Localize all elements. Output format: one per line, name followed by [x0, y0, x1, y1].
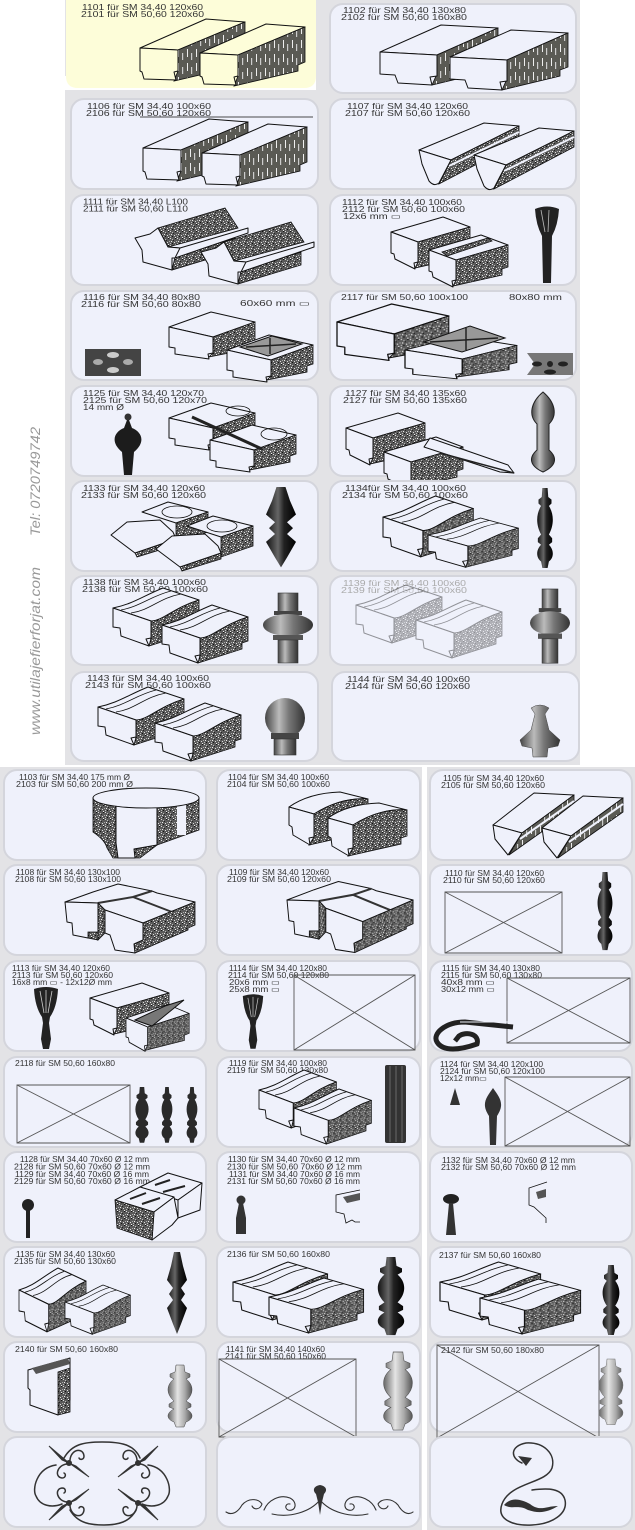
label 1105: 1105 für SM 34,40 120x60 — [443, 774, 544, 783]
background: bottom left sheet — [0, 767, 422, 1530]
sample: brush bar — [243, 994, 263, 1049]
label 1130: 2130 für SM 50,60 70x60 Ø 12 mm — [227, 1162, 362, 1172]
label 1108 — [15, 868, 121, 884]
label 1102 — [341, 6, 468, 22]
label 1112: 2112 für SM 50,60 100x60 — [342, 205, 466, 214]
panel: 1114 — [217, 961, 420, 1051]
label 1102: 1102 für SM 34,40 130x80 — [343, 6, 467, 15]
image placeholder — [437, 1345, 599, 1438]
image placeholder — [294, 975, 415, 1050]
panel: 1139 — [330, 576, 576, 665]
die blocks 2136 — [233, 1262, 364, 1333]
label 1110: 1110 für SM 34,40 120x60 — [445, 869, 544, 878]
label 2136: 2136 für SM 50,60 160x80 — [227, 1250, 330, 1259]
sample: baluster — [168, 1365, 192, 1427]
image placeholder — [445, 892, 562, 953]
panel: 1144 — [332, 672, 579, 761]
image placeholder — [17, 1085, 130, 1143]
label 1101 — [81, 3, 205, 19]
panel: 1101 highlighted — [65, 0, 316, 90]
panel: 1135 — [4, 1247, 206, 1337]
die blocks 2117 — [337, 304, 517, 379]
die blocks 1125 — [169, 403, 296, 472]
label 1116 — [81, 293, 310, 309]
ornament: four leaves scroll — [35, 1442, 169, 1525]
panel: 2137 — [430, 1247, 632, 1337]
die blocks 1128 mirrored — [115, 1173, 202, 1240]
label 1130: 2131 für SM 50,60 70x60 Ø 16 mm — [227, 1177, 360, 1186]
panel: 1111 — [71, 195, 318, 285]
label 1109: 2109 für SM 50,60 120x60 — [227, 875, 331, 884]
label 1139 — [341, 579, 468, 595]
label 1132: 1132 für SM 34,40 70x60 Ø 12 mm — [442, 1156, 575, 1165]
label 1112: 1112 für SM 34,40 100x60 — [342, 198, 463, 207]
label 1116: 60x60 mm ▭ — [240, 299, 310, 308]
label 1110 — [443, 869, 545, 885]
sample: ball finial — [265, 698, 305, 755]
die blocks 1143 — [98, 687, 241, 761]
sample: baluster — [598, 872, 612, 950]
sample: pin — [236, 1196, 246, 1234]
sample: ball knob — [263, 593, 313, 663]
sidebar: website: www.utilajefierforjat.com — [27, 567, 43, 735]
sample: tapered bar — [535, 206, 559, 283]
label 1144 — [345, 675, 471, 691]
label 1124 — [440, 1060, 545, 1083]
label 1104 — [227, 773, 330, 789]
label 1108: 2108 für SM 50,60 130x100 — [15, 875, 121, 884]
label 1114: 20x6 mm ▭ — [229, 978, 280, 987]
label 1133: 2133 für SM 50,60 120x60 — [81, 491, 207, 500]
label 1116: 2116 für SM 50,60 80x80 — [81, 300, 202, 309]
sidebar: phone: Tel: 0720749742 — [27, 427, 43, 536]
panel: 1133 — [71, 481, 318, 571]
label 1128: 1128 für SM 34,40 70x60 Ø 12 mm — [20, 1155, 149, 1164]
label 1135: 2135 für SM 50,60 130x60 — [14, 1257, 116, 1266]
label 1141 — [225, 1345, 326, 1361]
panel: 1124 — [430, 1057, 632, 1147]
label 1133 — [81, 484, 207, 500]
sample: pin — [443, 1194, 459, 1235]
die blocks 1112 — [391, 217, 508, 287]
background: bottom right sheet — [427, 767, 635, 1530]
sample: baluster — [384, 1352, 412, 1430]
label 1114: 25x8 mm ▭ — [229, 985, 280, 994]
label 1105 — [441, 774, 545, 790]
label 1139: 1139 für SM 34,40 100x60 — [343, 579, 467, 588]
ornament: S scroll — [501, 1443, 565, 1525]
label 1143: 2143 für SM 50,60 100x60 — [85, 681, 212, 690]
die blocks 1105 — [493, 793, 623, 858]
panel: 1103 — [4, 770, 206, 860]
image placeholder — [219, 1359, 356, 1437]
label 1104: 2104 für SM 50,60 100x60 — [227, 780, 330, 789]
label 2117 — [341, 293, 562, 302]
panel: 1128 — [4, 1152, 206, 1242]
label 1101: 2101 für SM 50,60 120x60 — [81, 10, 205, 19]
image placeholder — [507, 978, 630, 1043]
panel: 2117 — [330, 291, 576, 380]
label 1143 — [85, 674, 212, 690]
panel: 1125 — [71, 386, 318, 476]
sample: textured bar — [385, 1065, 406, 1143]
label 1114 — [228, 964, 329, 994]
die blocks 1111 — [135, 208, 314, 284]
sample: dark baluster — [378, 1257, 404, 1335]
die blocks 2137 — [440, 1262, 581, 1334]
panel: 2136 — [217, 1247, 420, 1337]
label 1108: 1108 für SM 34,40 130x100 — [16, 868, 120, 877]
die blocks 1106 — [140, 117, 313, 186]
die block fragment — [336, 1190, 360, 1223]
sample: ball knob — [530, 589, 570, 663]
label 1134 — [342, 484, 469, 500]
label 1111: 2111 für SM 50,60 L110 — [83, 204, 189, 214]
die blocks 1102 — [380, 25, 568, 90]
label 1105: 2105 für SM 50,60 120x60 — [441, 781, 545, 790]
label 1107 — [345, 102, 471, 118]
label 1107: 2107 für SM 50,60 120x60 — [345, 109, 471, 118]
die block fragment — [28, 1358, 70, 1415]
label 1138: 1138 für SM 34,40 100x60 — [83, 578, 207, 587]
label 1132 — [441, 1156, 576, 1172]
label 2137: 2137 für SM 50,60 160x80 — [439, 1251, 541, 1260]
image placeholder — [505, 1077, 630, 1146]
label 1138 — [82, 578, 209, 594]
label 1115 — [441, 964, 542, 994]
label 1127: 2127 für SM 50,60 135x60 — [343, 396, 468, 405]
label 1124: 2124 für SM 50,60 120x100 — [440, 1067, 545, 1076]
label 1144: 1144 für SM 34,40 100x60 — [347, 675, 471, 684]
label 1125: 1125 für SM 34,40 120x70 — [83, 389, 205, 398]
label 1134: 1134für SM 34,40 100x60 — [345, 484, 467, 493]
panel: 1110 — [430, 865, 632, 955]
label 1101: 1101 für SM 34,40 120x60 — [82, 3, 204, 12]
label 1127 — [343, 389, 468, 405]
label 1113: 16x8 mm ▭ - 12x12Ø mm — [12, 978, 112, 987]
label 1106 — [86, 102, 212, 118]
sample: ball-headed bar — [115, 414, 141, 475]
label 1112: 12x6 mm ▭ — [343, 212, 401, 221]
sample: triangle and spear — [450, 1088, 501, 1145]
panel: 1119 — [217, 1057, 420, 1147]
label 2140: 2140 für SM 50,60 160x80 — [15, 1345, 118, 1354]
panel: 1106 — [71, 99, 318, 189]
label 1125: 14 mm Ø — [83, 403, 125, 412]
sample: three balusters — [135, 1087, 197, 1143]
label 1119: 2119 für SM 50,60 130x80 — [227, 1066, 328, 1075]
sample: cone finial — [520, 705, 560, 757]
label 1141: 1141 für SM 34,40 140x60 — [226, 1345, 325, 1354]
label 1114: 2114 für SM 50,60 120x80 — [228, 971, 329, 980]
panel: 1108 — [4, 865, 206, 955]
label 1139: 2139 für SM 50,60 100x60 — [341, 586, 468, 595]
label 1130 — [227, 1155, 362, 1186]
label 1119 — [227, 1059, 328, 1075]
label 1144: 2144 für SM 50,60 120x60 — [345, 682, 471, 691]
label 1113: 1113 für SM 34,40 120x60 — [12, 964, 110, 973]
die blocks 1139 faded — [356, 585, 502, 658]
sample: baluster — [603, 1265, 619, 1335]
panel: 1107 — [330, 99, 576, 190]
label 1125 — [83, 389, 208, 412]
panel: ornament S — [430, 1437, 632, 1527]
label 1111: 1111 für SM 34,40 L100 — [83, 198, 189, 206]
label 1135 — [14, 1250, 116, 1266]
panel: 1134 — [330, 481, 576, 571]
label 1110: 2110 für SM 50,60 120x60 — [443, 876, 545, 885]
sample: baluster — [599, 1359, 623, 1425]
label 1138: 2138 für SM 50,60 100x60 — [82, 585, 209, 594]
die blocks 1133 — [111, 502, 253, 571]
panel: 1104 — [217, 770, 420, 860]
label 1127: 1127 für SM 34,40 135x60 — [345, 389, 467, 398]
label 1111 — [83, 198, 189, 214]
panel: 1116 — [71, 291, 318, 382]
background: top sheet — [65, 0, 580, 765]
label 1103: 1103 für SM 34,40 175 mm Ø — [19, 773, 131, 782]
label 2118: 2118 für SM 50,60 160x80 — [15, 1059, 115, 1068]
panel: 1127 — [330, 386, 576, 489]
panel: 1105 — [430, 770, 632, 860]
label 1109: 1109 für SM 34,40 120x60 — [229, 868, 329, 877]
sample: round headed pin — [22, 1199, 34, 1238]
label 1115: 2115 für SM 50,60 130x80 — [441, 971, 542, 980]
label 1102: 2102 für SM 50,60 160x80 — [341, 13, 468, 22]
panel: 1132 — [430, 1152, 632, 1242]
label 2117: 80x80 mm — [509, 293, 562, 302]
die blocks 1104 — [289, 792, 407, 856]
label 1125: 2125 für SM 50,60 120x70 — [83, 396, 208, 405]
panel: 1113 — [4, 961, 206, 1051]
label 1106: 1106 für SM 34,40 100x60 — [87, 102, 212, 111]
label 1116: 1116 für SM 34,40 80x80 — [83, 293, 201, 302]
label 1133: 1133 für SM 34,40 120x60 — [83, 484, 206, 493]
panel: 2118 — [4, 1057, 206, 1147]
label 2142: 2142 für SM 50,60 180x80 — [441, 1346, 544, 1355]
die blocks 1134 — [383, 496, 518, 567]
label 1106: 2106 für SM 50,60 120x60 — [86, 109, 212, 118]
die blocks 1113 — [90, 983, 189, 1051]
label 1115: 30x12 mm ▭ — [441, 985, 495, 994]
panel: 2140 — [4, 1342, 206, 1432]
sample: spear spindle — [266, 487, 296, 567]
die blocks 1116 — [169, 312, 313, 382]
label 2117: 2117 für SM 50,60 100x100 — [341, 293, 469, 302]
sample: bulb ended bar — [531, 392, 555, 472]
label 1113: 2113 für SM 50,60 120x60 — [12, 971, 113, 980]
panel: 1115 — [430, 961, 632, 1051]
label 1128: 1129 für SM 34,40 70x60 Ø 16 mm — [15, 1170, 149, 1179]
label 1115: 1115 für SM 34,40 130x80 — [442, 964, 540, 973]
label 1109 — [227, 868, 331, 884]
label 1115: 40x8 mm ▭ — [441, 978, 495, 987]
panel: 1130 — [217, 1152, 420, 1242]
panel: 1102 — [330, 4, 576, 93]
die block fragment — [529, 1182, 547, 1223]
panel: ornament frieze — [217, 1437, 420, 1527]
label 1130: 1131 für SM 34,40 70x60 Ø 16 mm — [229, 1170, 360, 1179]
label 1141: 2141 für SM 50,60 150x60 — [225, 1352, 326, 1361]
panel: 2142 — [430, 1342, 632, 1438]
ornament: scroll frieze — [226, 1485, 413, 1515]
panel: ornament oval — [4, 1437, 206, 1527]
die blocks 1138 — [113, 588, 248, 663]
die blocks 1109 — [287, 881, 413, 953]
die cylinder — [93, 788, 199, 858]
label 1114: 1114 für SM 34,40 120x80 — [229, 964, 327, 973]
label 1128 — [14, 1155, 150, 1186]
sample: scroll — [436, 1022, 513, 1049]
label 1132: 2132 für SM 50,60 70x60 Ø 12 mm — [441, 1163, 576, 1172]
label 1135: 1135 für SM 34,40 130x60 — [16, 1250, 115, 1259]
sample: square plate — [85, 349, 141, 376]
label 1130: 1130 für SM 34,40 70x60 Ø 12 mm — [228, 1155, 360, 1164]
sample: square plate — [527, 353, 573, 375]
label 1119: 1119 für SM 34,40 100x80 — [229, 1059, 327, 1068]
die blocks 1107 — [419, 123, 574, 190]
label 1103: 2103 für SM 50,60 200 mm Ø — [16, 780, 134, 789]
label 1128: 2129 für SM 50,60 70x60 Ø 16 mm — [14, 1177, 150, 1186]
label 1134: 2134 für SM 50,60 100x60 — [342, 491, 469, 500]
label 1113 — [12, 964, 113, 987]
panel: 1138 — [71, 576, 318, 665]
die blocks 1135 — [19, 1268, 130, 1334]
label 1143: 1143 für SM 34,40 100x60 — [87, 674, 210, 683]
label 1124: 1124 für SM 34,40 120x100 — [440, 1060, 543, 1069]
label 1103 — [16, 773, 134, 789]
die blocks 1119 — [259, 1070, 371, 1144]
label 1107: 1107 für SM 34,40 120x60 — [347, 102, 469, 111]
panel: 1109 — [217, 865, 420, 955]
panel: 1143 — [71, 672, 318, 761]
label 1128: 2128 für SM 50,60 70x60 Ø 12 mm — [14, 1162, 150, 1172]
panel: 1112 — [330, 195, 576, 287]
panel: 1141 — [217, 1342, 420, 1437]
die blocks 1108 — [65, 884, 195, 953]
die blocks 1127 — [346, 413, 514, 489]
label 1124: 12x12 mm▭ — [440, 1074, 487, 1083]
die blocks 1101 — [140, 19, 305, 86]
sample: brush bar — [34, 987, 58, 1049]
label 1104: 1104 für SM 34,40 100x60 — [228, 773, 329, 782]
sample: spindle — [167, 1252, 187, 1334]
label 1112 — [342, 198, 466, 221]
sample: turned spindle — [537, 488, 553, 568]
